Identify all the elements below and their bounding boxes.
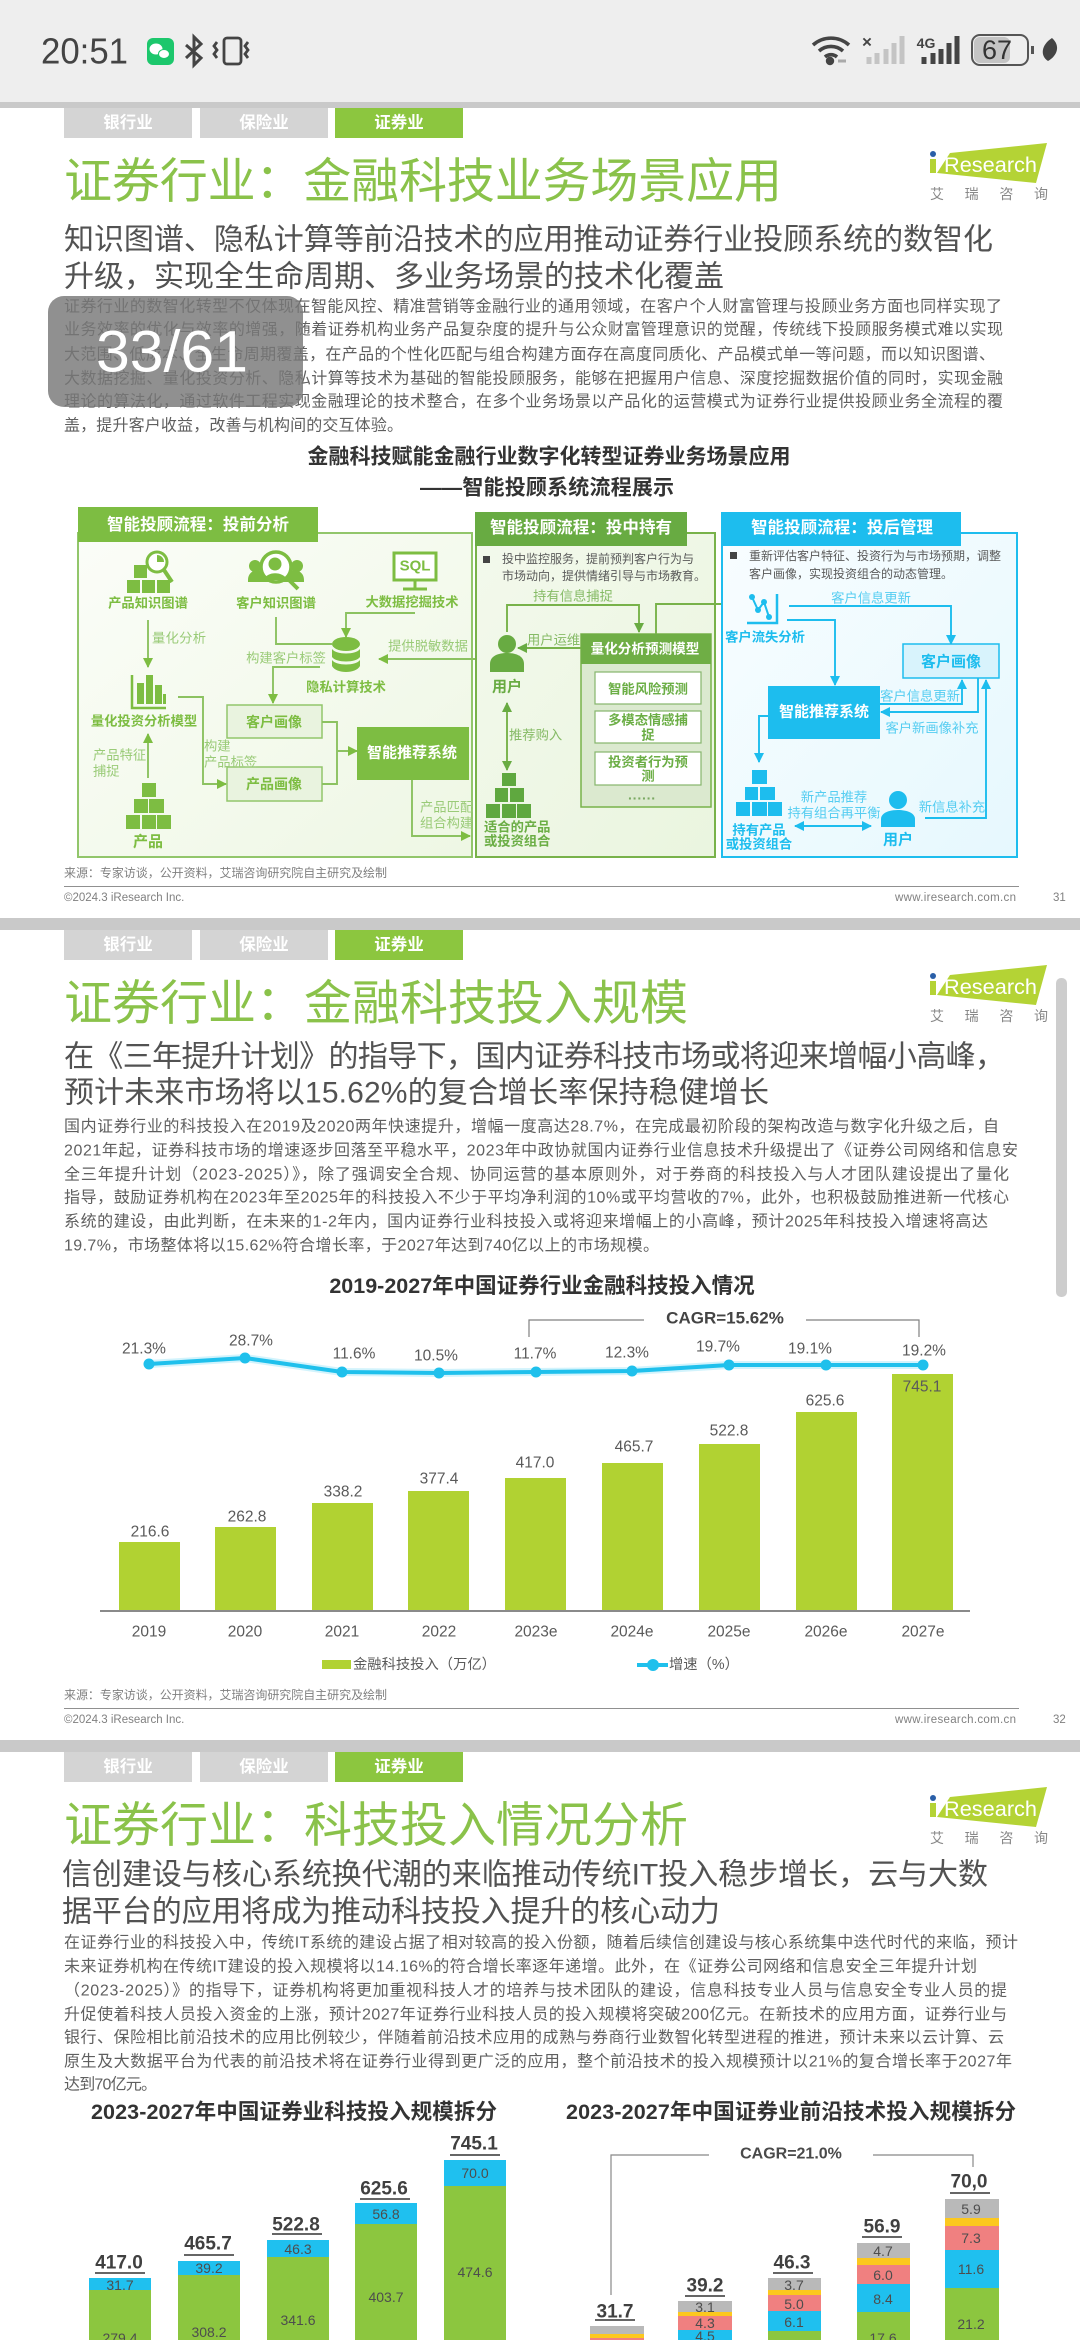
- segment values: 474.6: [457, 2264, 493, 2280]
- growth labels: 12.3%: [605, 1344, 649, 1362]
- panel heading: [475, 512, 687, 546]
- panel heading: [721, 512, 961, 546]
- label: user: 用户: [492, 678, 522, 696]
- arrow: new info supplement: 新信息补充: [919, 798, 985, 814]
- arrow: feature capture: [93, 734, 148, 778]
- segment values: 21.2: [957, 2316, 985, 2332]
- bar values: 625.6: [806, 1392, 844, 1410]
- iResearch logo: 艾瑞咨询: [930, 1008, 1048, 1024]
- subtitle: [62, 1858, 988, 1928]
- grey segments: [590, 2199, 999, 2334]
- arrow: customer tags: [246, 650, 326, 703]
- diagram title: 金融科技赋能金融行业数字化转型证券业务场景应用: [308, 444, 790, 468]
- page 31 footer: 来源：专家访谈，公开资料，艾瑞咨询研究院自主研究及绘制: [64, 865, 387, 880]
- body text: （2023-2025）》的指导下，证券机构将更加重视科技人才的培养与技术团队的建设，信息科技专业人员与信息安全专业人员的提: [64, 1982, 1007, 2000]
- panel: pre-investment analysis: [78, 507, 482, 857]
- legend: 增速（%）: [669, 1656, 739, 1673]
- page 32 footer: 32: [1053, 1714, 1066, 1726]
- x axis: 2019: [132, 1624, 166, 1640]
- category tabs: 银行业: [103, 935, 153, 954]
- body text: [64, 298, 1003, 434]
- title: 证券行业：金融科技投入规模: [64, 978, 688, 1030]
- growth labels: 10.5%: [414, 1348, 458, 1364]
- box: recommender system: [357, 727, 469, 780]
- growth labels: 19.2%: [902, 1342, 946, 1360]
- totals: [595, 2172, 990, 2322]
- diagram title: [308, 444, 790, 500]
- panel heading: [78, 507, 318, 542]
- totals: 465.7: [184, 2234, 232, 2254]
- chart: tech investment breakdown: [89, 2100, 506, 2340]
- label: holdings: [726, 822, 793, 852]
- totals: 625.6: [360, 2178, 408, 2200]
- model item: risk: 智能风险预测: [608, 680, 688, 696]
- page divider: [0, 918, 1080, 930]
- category tabs: 证券业: [374, 934, 424, 954]
- arrow: to churn analysis: [656, 604, 736, 634]
- bar values: 417.0: [516, 1454, 555, 1472]
- segment values: 56.8: [372, 2206, 400, 2222]
- arrow: user operations: 用户运维: [527, 632, 580, 648]
- arrow: recommended purchase: 推荐购入: [509, 728, 562, 742]
- model item: emotion: [595, 711, 701, 743]
- arrow: customer tags: 构建客户标签: [246, 650, 326, 666]
- segment values: 46.3: [284, 2241, 312, 2257]
- arrow: feature capture: 产品特征: [93, 748, 146, 762]
- segment values: 341.6: [280, 2312, 316, 2328]
- model item: behaviour: 投资者行为预: [608, 754, 688, 770]
- page counter overlay: [48, 296, 303, 407]
- segment values: [695, 2201, 985, 2340]
- growth labels: [122, 1332, 946, 1364]
- category tabs: 证券业: [374, 112, 424, 132]
- body text: 理论的算法化，通过软件工程实现金融理论的技术整合，在多个业务场景以产品化的运营模式为证券行业提供投顾业务全流程的覆: [64, 392, 1003, 410]
- arrow: rebalance: 持有组合再平衡: [787, 806, 881, 820]
- page 32 footer: 来源：专家访谈，公开资料，艾瑞咨询研究院自主研究及绘制: [64, 1687, 387, 1702]
- segment values: 4.7: [873, 2243, 893, 2259]
- x axis: 2024e: [610, 1624, 654, 1640]
- page 31 footer: [64, 865, 1066, 904]
- arrow: product tags: [178, 697, 257, 784]
- bar values: 262.8: [228, 1508, 266, 1526]
- arrow: rebalance: [787, 790, 881, 826]
- arrow: info update to profile: 客户信息更新: [880, 688, 960, 704]
- clock: 20:51: [41, 30, 128, 72]
- body text: 业务效率的优化与效率的增强，随着证券机构业务产品复杂度的提升与公众财富管理意识的觉醒，传统线下投顾服务模式难以实现: [64, 320, 1003, 338]
- title: 证券行业：金融科技业务场景应用: [64, 156, 782, 208]
- icon: wechat: [147, 38, 174, 65]
- bar values: 745.1: [903, 1378, 941, 1396]
- segment values: 11.6: [958, 2261, 984, 2277]
- arrow: churn to recommender: [787, 620, 835, 685]
- icon: signal 4G: 4G: [917, 35, 935, 51]
- legend: 金融科技投入（万亿）: [353, 1656, 496, 1673]
- segment values: 5.9: [961, 2201, 981, 2217]
- chart: frontier tech breakdown: [566, 2100, 1016, 2340]
- scrollbar: [1056, 978, 1067, 1297]
- x axis: 2023e: [514, 1624, 558, 1640]
- body text: 19.7%，市场整体将以15.62%符合增长率，于2027年达到740亿以上的市场规模。: [64, 1236, 659, 1254]
- category tabs: [64, 1752, 463, 1782]
- subtitle: 升级，实现全生命周期、多业务场景的技术化覆盖: [64, 260, 724, 294]
- bullet text: 客户画像，实现投资组合的动态管理。: [749, 566, 953, 581]
- green segments: [768, 2288, 999, 2340]
- subtitle: 在《三年提升计划》的指导下，国内证券科技市场或将迎来增幅小高峰，: [64, 1040, 1005, 1074]
- diagram title: ——智能投顾系统流程展示: [420, 476, 674, 500]
- body text: 全三年提升计划（2023-2025）》，除了强调安全合规、协同运营的基本原则外，对于券商的科技投入与人才团队建设提出了量化: [64, 1166, 1009, 1184]
- label: user: 用户: [883, 830, 913, 848]
- growth labels: 11.7%: [514, 1346, 557, 1362]
- icon: bar chart: [132, 675, 166, 708]
- totals: 417.0: [95, 2252, 143, 2274]
- arrow: customer info update: [789, 590, 951, 644]
- icon: signal sim 1: [862, 32, 902, 64]
- model item: emotion: 捉: [641, 726, 655, 742]
- model item: behaviour: 测: [641, 768, 655, 784]
- icon: battery: 67: [982, 35, 1012, 65]
- segment values: 4.3: [695, 2315, 715, 2331]
- panel: holding: [475, 512, 736, 857]
- arrow: product matching: 产品匹配: [420, 800, 473, 814]
- iResearch logo: 艾瑞咨询: [930, 1830, 1048, 1846]
- growth labels: 19.7%: [696, 1338, 740, 1356]
- icon: SQL monitor: SQL: [400, 558, 430, 574]
- page counter overlay: 33/61: [96, 320, 248, 384]
- subtitle: [64, 1040, 1005, 1110]
- segment values: 31.7: [106, 2277, 134, 2293]
- CAGR bracket: [611, 2146, 973, 2295]
- x axis: [100, 1610, 970, 1640]
- totals: 31.7: [597, 2302, 633, 2322]
- arrow: quantitative analysis: [148, 620, 206, 667]
- page 31 header: [64, 108, 1048, 208]
- box: customer profile: [903, 644, 999, 678]
- subtitle: 知识图谱、隐私计算等前沿技术的应用推动证券行业投顾系统的数智化: [64, 224, 993, 256]
- arrow: big data to database: [346, 613, 415, 637]
- body text: 升促使着科技人员投入资金的上涨，预计2027年证券行业科技人员的投入规模将突破200亿元。在新技术的应用方面，证券行业与: [64, 2004, 1007, 2024]
- arrow: feature capture: 捕捉: [93, 764, 120, 778]
- box: recommender system: [768, 686, 880, 739]
- arrow: new profile supplement: [881, 678, 979, 736]
- arrow: product matching: [412, 780, 473, 836]
- bullet text: [730, 548, 1001, 581]
- body text: 2021年起，证券科技市场的增速逐步回落至平稳水平，2023年中政协就国内证券行业信息技术升级提出了《证券公司网络和信息安: [64, 1140, 1018, 1160]
- chart: fintech investment 2019-2027: [100, 1273, 970, 1673]
- icon: churn chart: [747, 594, 777, 623]
- growth labels: 19.1%: [788, 1340, 832, 1358]
- x axis: 2025e: [707, 1624, 751, 1640]
- icon: product knowledge graph: [127, 552, 172, 593]
- bars: [119, 1374, 953, 1611]
- segment values: 3.7: [784, 2277, 804, 2293]
- totals: 46.3: [774, 2252, 810, 2274]
- icon: signal 4G: [917, 35, 957, 64]
- box: customer profile: 客户画像: [246, 714, 302, 730]
- segment values: 5.0: [784, 2296, 804, 2312]
- page 31 footer: ©2024.3 iResearch Inc.: [64, 892, 184, 904]
- body text: 大范围、低成本、全生命周期覆盖，在产品的个性化匹配与组合构建方面存在高度同质化、产品模式单一等问题，而以知识图谱、: [64, 346, 995, 364]
- bar values: 522.8: [710, 1422, 748, 1440]
- label: suitable products: [484, 818, 551, 848]
- segment values: 70.0: [461, 2165, 489, 2181]
- arrow: new info supplement: [919, 680, 986, 818]
- arrow: recommended purchase: [507, 703, 562, 770]
- page 32 footer: [64, 1687, 1066, 1726]
- bar values: 377.4: [420, 1470, 459, 1488]
- category tabs: 银行业: [103, 1757, 153, 1776]
- arrow: new profile supplement: 客户新画像补充: [885, 720, 979, 736]
- box: recommender system: 智能推荐系统: [779, 702, 869, 720]
- chart title: 2019-2027年中国证券行业金融科技投入情况: [329, 1273, 755, 1298]
- page 31 footer: www.iresearch.com.cn: [894, 892, 1016, 904]
- page 32 footer: www.iresearch.com.cn: [894, 1714, 1016, 1726]
- category tabs: 证券业: [374, 1756, 424, 1776]
- connector: customer graph to database: [276, 617, 332, 644]
- label: churn analysis: 客户流失分析: [725, 628, 805, 644]
- label: suitable products: 适合的产品: [484, 818, 550, 834]
- icon: products pyramid: [126, 783, 171, 829]
- CAGR bracket: CAGR=15.62%: [666, 1308, 784, 1328]
- arrow: product tags: 构建: [204, 738, 231, 754]
- label: privacy computing: 隐私计算技术: [306, 678, 386, 694]
- icon: wifi: [813, 38, 849, 63]
- growth labels: 11.6%: [333, 1346, 376, 1362]
- panel: post-investment management: [721, 512, 1017, 857]
- body text: [64, 1118, 1018, 1254]
- panel heading: 智能投顾流程：投前分析: [107, 514, 289, 534]
- arrow: holding info capture: [507, 588, 639, 632]
- body text: 银行、保险相比前沿技术的应用比例较少，伴随着前沿技术应用的成熟与券商行业数智化转型进程的推进，预计未来以云计算、云: [64, 2028, 1004, 2046]
- totals: 39.2: [687, 2276, 723, 2296]
- label: holdings: 持有产品: [732, 822, 786, 838]
- arrow: holding info capture: 持有信息捕捉: [533, 588, 613, 604]
- segment values: 6.0: [873, 2267, 893, 2283]
- arrow: desensitized data: [379, 638, 482, 659]
- body text: 原生及大数据平台为代表的前沿技术将在证券行业得到更广泛的应用，整个前沿技术的投入规模预计以21%的复合增长率于2027年: [64, 2052, 1012, 2070]
- blue segments: [678, 2250, 999, 2340]
- iResearch logo: [930, 143, 1048, 202]
- label: suitable products: 或投资组合: [484, 832, 551, 848]
- panel heading: 智能投顾流程：投中持有: [490, 517, 672, 537]
- totals: 70,0: [951, 2172, 987, 2192]
- arrow: quantitative analysis: 量化分析: [152, 630, 206, 646]
- green segments: [89, 2186, 506, 2340]
- body text: 系统的建设，由此判断，在未来的1-2年内，国内证券行业科技投入或将迎来增幅上的小高峰，预计2025年科技投入增速将高达: [64, 1212, 988, 1230]
- body text: 在证券行业的科技投入中，传统IT系统的建设占据了相对较高的投入份额，随着后续信创建设与核心系统集中迭代时代的来临，预计: [64, 1934, 1018, 1952]
- body text: 达到70亿元。: [64, 2076, 157, 2094]
- CAGR bracket: [529, 1308, 919, 1337]
- x axis: 2022: [422, 1624, 456, 1640]
- arrow: info update to profile: [880, 680, 962, 704]
- body text: 国内证券行业的科技投入在2019及2020两年快速提升，增幅一度高达28.7%，在完成最初阶段的架构改造与数字化升级之后，自: [64, 1118, 999, 1136]
- bar values: 338.2: [324, 1484, 362, 1500]
- model item: behaviour: [595, 752, 701, 785]
- segment values: 308.2: [191, 2324, 227, 2340]
- body text: 证券行业的数智化转型不仅体现在智能风控、精准营销等金融行业的通用领域，在客户个人财富管理与投顾业务方面也同样实现了: [64, 298, 1002, 316]
- chart title: 2023-2027年中国证券业前沿技术投入规模拆分: [566, 2100, 1016, 2124]
- bar values: 216.6: [131, 1524, 169, 1540]
- arrow: customer info update: 客户信息更新: [831, 590, 911, 606]
- iResearch logo: 艾瑞咨询: [930, 186, 1048, 202]
- box: quant prediction model: [581, 634, 711, 807]
- connector: profiles to recommender: [322, 722, 357, 784]
- category tabs: 保险业: [239, 1756, 289, 1776]
- panel heading: 智能投顾流程：投后管理: [751, 517, 934, 537]
- body text: 指导，鼓励证券机构在2023年至2025年的科技投入不少于平均净利润的10%或平均营收的7%，此外，也积极鼓励推进新一代核心: [64, 1188, 1009, 1206]
- totals: 522.8: [272, 2214, 320, 2236]
- title: 证券行业：科技投入情况分析: [64, 1800, 688, 1852]
- x axis: 2021: [325, 1624, 359, 1640]
- icon: holdings pyramid: [736, 770, 782, 816]
- totals: 745.1: [450, 2134, 498, 2154]
- yellow segments: [590, 2218, 999, 2338]
- box: recommender system: 智能推荐系统: [367, 744, 457, 762]
- growth line: [144, 1352, 928, 1378]
- segment values: 39.2: [195, 2260, 223, 2276]
- segment values: 8.4: [873, 2291, 893, 2307]
- iResearch logo: Research: [944, 1797, 1037, 1821]
- icon: leaf: [1043, 38, 1057, 61]
- subtitle: 信创建设与核心系统换代潮的来临推动传统IT投入稳步增长，云与大数: [62, 1858, 988, 1892]
- icon: battery: [972, 35, 1034, 65]
- iResearch logo: [930, 965, 1048, 1024]
- category tabs: 保险业: [239, 934, 289, 954]
- arrow: product matching: 组合构建: [420, 816, 473, 830]
- bullet text: 市场动向，提供情绪引导与市场教育。: [502, 568, 706, 583]
- blue segments: [89, 2160, 506, 2290]
- box: product profile: [227, 767, 322, 801]
- body text: 未来证券机构在传统IT建设的投入规模将以14.16%的符合增长率逐年递增。此外，在《证券公司网络和信息安全三年提升计划: [64, 1956, 977, 1976]
- totals: 56.9: [864, 2216, 900, 2238]
- icon: products pyramid: [486, 773, 531, 818]
- body text: 大数据挖掘、量化投资分析、隐私计算等技术为基础的智能投顾服务，能够在把握用户信息、深度挖掘数据价值的同时，实现金融: [64, 368, 1003, 388]
- bullet text: [483, 551, 706, 583]
- category tabs: 保险业: [239, 112, 289, 132]
- segment values: 6.1: [784, 2314, 804, 2330]
- icon: user: [881, 791, 915, 827]
- model item: risk: [595, 672, 701, 704]
- segment values: 3.1: [695, 2299, 715, 2315]
- bar values: [131, 1378, 941, 1540]
- subtitle: 据平台的应用将成为推动科技投入提升的核心动力: [62, 1896, 720, 1928]
- totals: [95, 2134, 500, 2274]
- page divider: [0, 1740, 1080, 1752]
- x axis: 2020: [228, 1624, 263, 1640]
- page 33 header: [64, 1752, 1048, 1852]
- subtitle: 预计未来市场将以15.62%的复合增长率保持稳健增长: [64, 1076, 769, 1110]
- chart title: 2023-2027年中国证券业科技投入规模拆分: [91, 2100, 497, 2124]
- subtitle: [64, 224, 993, 294]
- category tabs: [64, 930, 463, 960]
- iResearch logo: Research: [944, 153, 1037, 177]
- page 31 footer: 31: [1053, 892, 1066, 904]
- box: quant prediction model: 量化分析预测模型: [591, 640, 699, 656]
- label: big data mining: 大数据挖掘技术: [365, 594, 459, 610]
- model item: emotion: 多模态情感捕: [608, 712, 688, 728]
- red segments: [590, 2226, 999, 2340]
- arrow: rebalance: 新产品推荐: [801, 790, 867, 804]
- growth labels: 21.3%: [122, 1340, 166, 1358]
- legend: [322, 1656, 739, 1673]
- box: customer profile: [227, 705, 322, 738]
- icon: user: [490, 635, 524, 672]
- x axis: 2026e: [804, 1624, 848, 1640]
- bar values: 465.7: [615, 1438, 653, 1456]
- body text: 盖，提升客户收益，改善与机构间的交互体验。: [64, 416, 403, 434]
- category tabs: 银行业: [103, 113, 153, 132]
- segment values: 403.7: [368, 2289, 404, 2305]
- iResearch logo: [930, 1787, 1048, 1846]
- bullet text: 重新评估客户特征、投资行为与市场预期，调整: [749, 548, 1001, 563]
- box: product profile: 产品画像: [246, 776, 302, 792]
- iResearch logo: Research: [944, 975, 1037, 999]
- page 32 footer: ©2024.3 iResearch Inc.: [64, 1714, 184, 1726]
- icon: database: [332, 637, 360, 672]
- arrow: product tags: 产品标签: [204, 754, 257, 770]
- CAGR bracket: CAGR=21.0%: [740, 2146, 842, 2162]
- ellipsis: ······: [628, 790, 656, 806]
- bullet text: 投中监控服务，提前预判客户行为与: [502, 551, 694, 566]
- category tabs: [64, 108, 463, 138]
- label: quantitative model: 量化投资分析模型: [91, 712, 197, 728]
- page 32 header: [64, 930, 1048, 1030]
- body text: [64, 1934, 1018, 2094]
- x axis: 2027e: [901, 1624, 945, 1640]
- icon: SQL monitor: [394, 553, 436, 589]
- segment values: 7.3: [961, 2230, 981, 2246]
- box: customer profile: 客户画像: [921, 652, 981, 670]
- icon: vibrate: [214, 38, 248, 64]
- segment values: [102, 2165, 493, 2340]
- icon: bluetooth: [186, 37, 201, 65]
- label: product knowledge graph: 产品知识图谱: [108, 594, 188, 610]
- arrow: desensitized data: 提供脱敏数据: [388, 638, 468, 654]
- icon: signal sim 1: ×: [862, 32, 872, 52]
- label: customer knowledge graph: 客户知识图谱: [236, 594, 316, 610]
- arrow: recommender to holdings: [759, 716, 768, 762]
- growth labels: 28.7%: [229, 1332, 273, 1350]
- label: product: 产品: [133, 834, 163, 850]
- status bar: [0, 0, 1080, 108]
- label: holdings: 或投资组合: [726, 836, 793, 852]
- icon: customer knowledge graph: [248, 552, 304, 589]
